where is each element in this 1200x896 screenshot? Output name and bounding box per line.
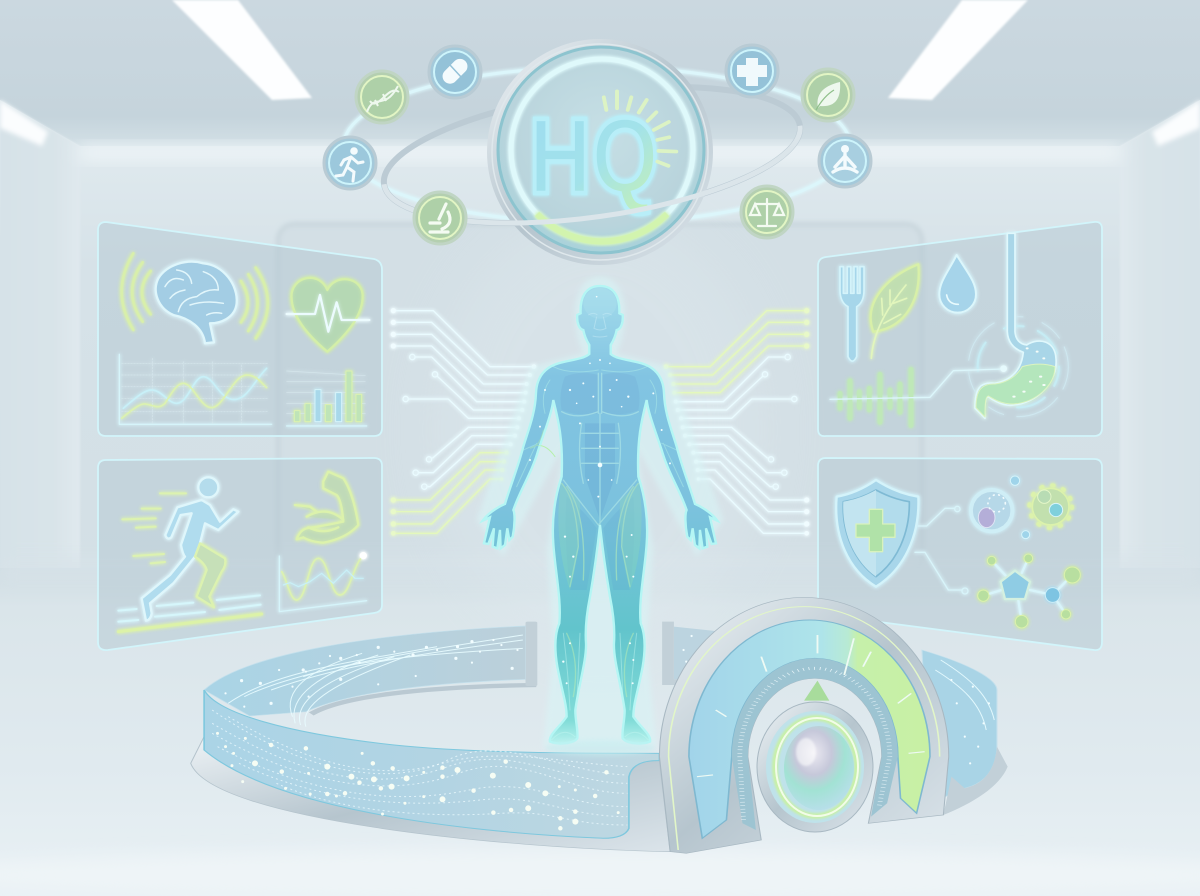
orbit icon: DNA: [356, 71, 408, 123]
ceiling lights: [0, 0, 1200, 146]
silver base: [191, 737, 670, 852]
front glass: [204, 690, 659, 838]
tilted silver ring back: [375, 64, 809, 246]
platform back wall: [204, 622, 1008, 815]
connector lines: [915, 506, 968, 594]
pulse chart: [279, 552, 367, 612]
figure glow: [477, 277, 723, 747]
front data dots: [217, 733, 618, 828]
data streams: [212, 710, 627, 825]
icon: stomach: [968, 233, 1068, 418]
orbit ring: [344, 67, 850, 223]
circuit lines left: [391, 308, 536, 536]
icon: blue cell: [971, 476, 1030, 539]
icon: fork: [840, 267, 864, 361]
platform front ring: [191, 690, 670, 852]
tilted silver ring front: [384, 126, 809, 246]
orbit icon: scales: [741, 186, 793, 238]
speckle texture: [483, 286, 717, 744]
icon: runner: [142, 477, 238, 621]
central orb: [757, 702, 873, 832]
back wall data lights: [226, 636, 989, 763]
circuit lines right: [664, 308, 809, 536]
icon: green microbe: [1029, 485, 1072, 528]
needle marker: [804, 681, 829, 701]
orbit icon: leaf: [802, 69, 854, 121]
muscle detail: [517, 367, 683, 740]
gauge major ticks: [697, 635, 925, 777]
gauge coloured band: [689, 620, 930, 838]
back wall light streams: [228, 635, 994, 730]
gauge tick band: [732, 658, 898, 830]
right wall section: [922, 650, 997, 803]
sun rays: [604, 91, 676, 166]
panel: running and muscle: [98, 458, 382, 650]
orbit icon: medical cross: [726, 45, 778, 97]
data dots: [529, 296, 671, 684]
waveform: [830, 365, 1007, 426]
gauge: [659, 597, 949, 853]
emblem disc: [487, 39, 713, 265]
gauge silver arch: [659, 597, 949, 853]
line chart: [119, 354, 272, 424]
bar chart: [287, 371, 367, 426]
icon: molecule: [978, 554, 1080, 628]
icon: muscle arm: [295, 472, 358, 543]
speed lines and track: [118, 493, 262, 632]
panel: brain and heart: [98, 222, 382, 436]
body silhouette: [483, 286, 717, 744]
orbit icon: meditation: [819, 135, 871, 187]
icon: heart with pulse: [287, 278, 369, 352]
human figure: [477, 277, 723, 747]
orbit icon: running: [324, 137, 376, 189]
icon: water drop: [939, 255, 976, 313]
orbit icon: microscope: [414, 192, 466, 244]
floor reflection under feet: [545, 740, 655, 756]
panel: nutrition and gut: [818, 222, 1102, 436]
icon: leaf: [871, 264, 919, 358]
orbit icon: capsule: [429, 46, 481, 98]
HQ emblem with orbit: [324, 39, 871, 265]
icon: brain: [122, 253, 268, 343]
head highlight: [583, 288, 617, 337]
icon: shield with cross: [836, 480, 918, 587]
panel: immunity: [818, 458, 1102, 650]
HQ letters: HQ: [529, 95, 659, 216]
